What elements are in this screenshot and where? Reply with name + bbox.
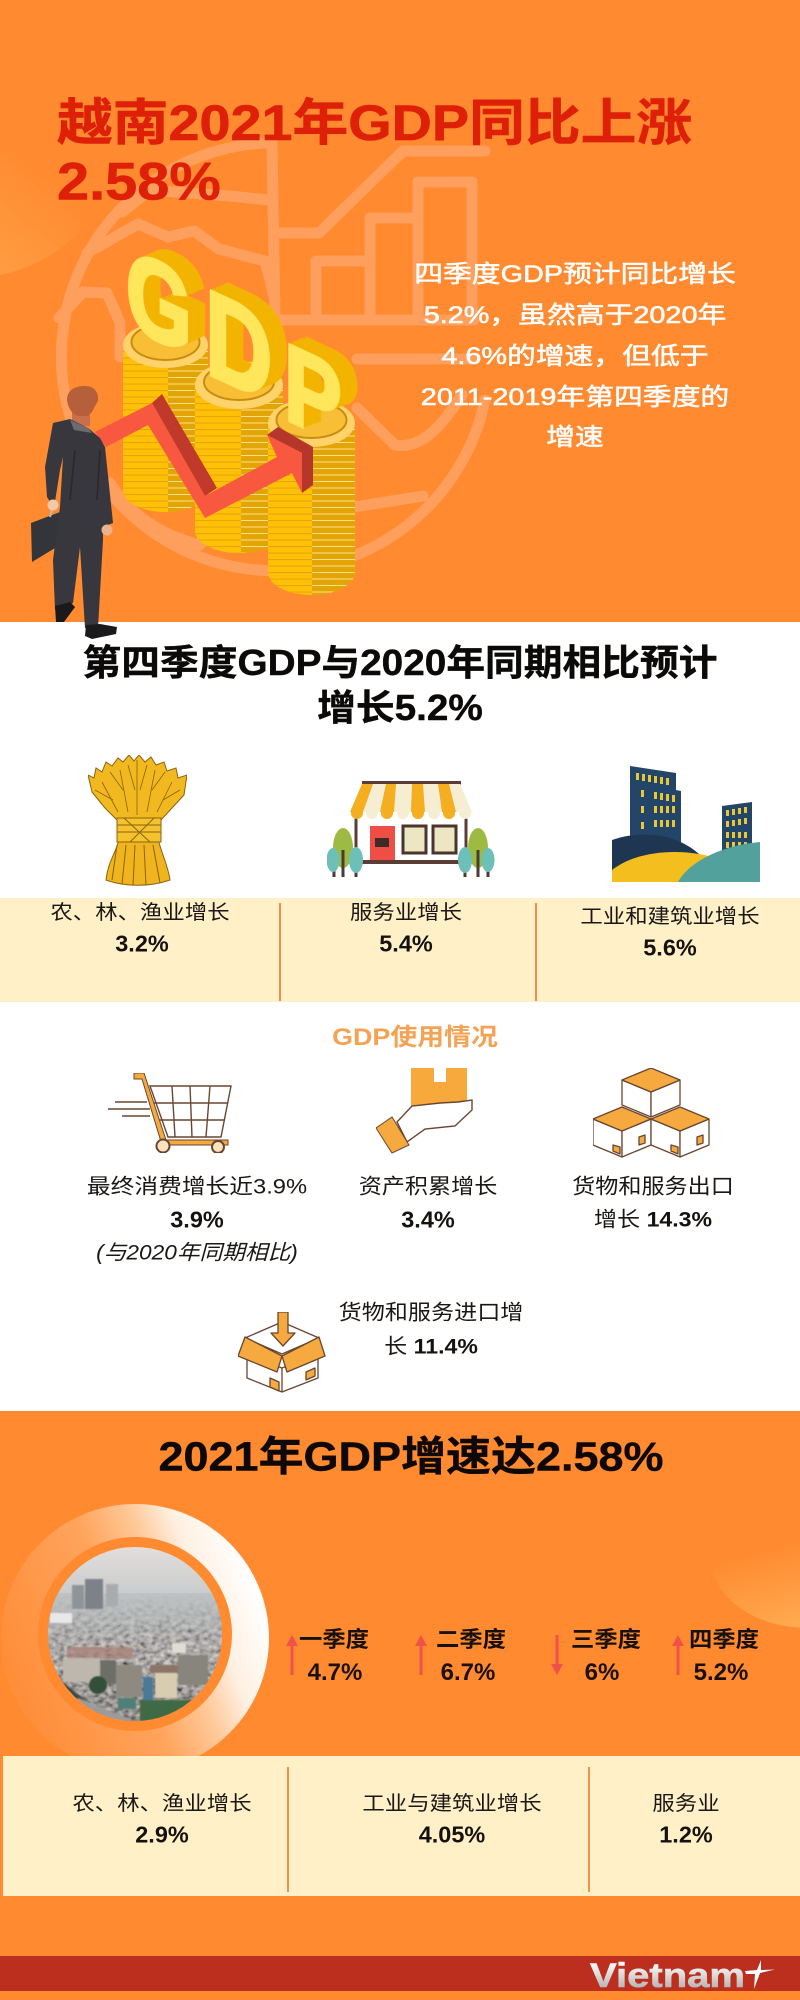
sector: industry and construction: 工业与建筑业增长 xyxy=(362,1793,542,1815)
sector: services: 服务业 xyxy=(652,1793,720,1815)
icon: open box with arrow xyxy=(238,1312,326,1393)
heading: fourth quarter growth: 增长5.2% xyxy=(317,687,483,728)
sector: services: 5.4% xyxy=(379,930,433,956)
illustration: businessman with briefcase xyxy=(31,386,117,639)
sector: agriculture: 2.9% xyxy=(135,1822,189,1848)
text: asset accumulation: 资产积累增长 xyxy=(359,1176,497,1198)
quarter 2: 6.7% xyxy=(441,1659,495,1686)
icon: shopping cart xyxy=(108,1073,232,1153)
quarter 1 xyxy=(286,1627,369,1686)
icon: wheat sheaf xyxy=(88,755,187,886)
text: asset accumulation: 3.4% xyxy=(401,1206,455,1232)
heading: GDP use: GDP使用情况 xyxy=(332,1024,498,1051)
quarter 4: 5.2% xyxy=(694,1659,748,1686)
sector: services: 1.2% xyxy=(659,1822,713,1848)
text: exports of goods and services xyxy=(572,1176,734,1232)
sector: agriculture xyxy=(50,902,230,956)
quarter 1: 4.7% xyxy=(308,1659,362,1686)
title: 越南2021年GDP同比上涨 xyxy=(57,95,692,151)
text: imports of goods and services xyxy=(339,1302,523,1358)
title: 2.58% xyxy=(57,152,221,212)
sector: agriculture xyxy=(72,1793,252,1848)
sector: services xyxy=(652,1793,720,1848)
title xyxy=(57,95,692,212)
text: exports of goods and services: 增长 14.3% xyxy=(594,1208,712,1232)
quarter 4 xyxy=(672,1627,759,1686)
sector: industry and construction xyxy=(362,1793,542,1848)
text: final consumption: (与2020年同期相比) xyxy=(96,1242,298,1264)
sector: industry and construction: 5.6% xyxy=(643,934,697,960)
icon: shop xyxy=(327,781,494,877)
sector: agriculture: 农、林、渔业增长 xyxy=(50,902,230,924)
sector: industry and construction xyxy=(580,906,760,960)
panel: hero xyxy=(0,0,800,622)
decorative light blob top left xyxy=(0,196,61,275)
text: final consumption xyxy=(87,1176,307,1264)
panel: sector growth band xyxy=(0,898,800,1002)
quarter 4: 四季度 xyxy=(689,1627,759,1652)
quarter 3 xyxy=(551,1627,641,1686)
text: exports of goods and services: 货物和服务出口 xyxy=(572,1176,734,1198)
quarter 2: 二季度 xyxy=(436,1627,506,1652)
quarter 3: 三季度 xyxy=(571,1627,641,1652)
icon: stacked boxes xyxy=(593,1068,710,1158)
sector: industry and construction: 4.05% xyxy=(419,1822,485,1848)
intro paragraph xyxy=(414,261,736,451)
text: final consumption: 3.9% xyxy=(170,1206,224,1232)
sector: services xyxy=(350,902,462,956)
heading: 2021 growth: 2021年GDP增速达2.58% xyxy=(159,1434,663,1480)
icon: hand holding package xyxy=(376,1068,473,1154)
sector: agriculture: 3.2% xyxy=(115,930,169,956)
quarter 3: 6% xyxy=(585,1659,619,1686)
sector: services: 服务业增长 xyxy=(350,902,462,924)
intro paragraph: 四季度GDP预计同比增长 xyxy=(414,261,736,288)
icon: city buildings on hills xyxy=(612,766,760,882)
decorative light blob right xyxy=(718,1561,800,1628)
illustration: GDP coin stacks: P xyxy=(284,319,342,468)
illustration: GDP coin stacks: D xyxy=(205,262,272,429)
illustration: GDP coin stacks xyxy=(123,240,358,595)
panel: full-year 2021 GDP xyxy=(0,1411,800,2000)
heading: fourth quarter growth xyxy=(83,642,717,728)
sector: agriculture: 农、林、渔业增长 xyxy=(72,1793,252,1815)
text: imports of goods and services: 货物和服务进口增 xyxy=(339,1302,523,1324)
intro paragraph: 2011-2019年第四季度的 xyxy=(421,384,729,411)
panel: fourth quarter GDP by sector and GDP use xyxy=(0,622,800,1411)
sector: industry and construction: 工业和建筑业增长 xyxy=(580,906,760,928)
panel: full-year sector growth band xyxy=(3,1756,800,1896)
intro paragraph: 5.2%，虽然高于2020年 xyxy=(424,302,726,329)
text: asset accumulation xyxy=(359,1176,497,1232)
image: city photo in ring xyxy=(1,1504,269,1756)
heading: fourth quarter growth: 第四季度GDP与2020年同期相比预计 xyxy=(83,642,717,683)
footer bar with Vietnam+ logo xyxy=(0,1956,800,1991)
intro paragraph: 4.6%的增速，但低于 xyxy=(441,343,709,370)
text: imports of goods and services: 长 11.4% xyxy=(384,1336,478,1358)
globe and chart background illustration xyxy=(54,138,490,576)
quarter 1: 一季度 xyxy=(299,1627,369,1652)
text: final consumption: 最终消费增长近3.9% xyxy=(87,1176,307,1198)
quarter 2 xyxy=(415,1627,506,1686)
intro paragraph: 增速 xyxy=(546,424,604,451)
arrow: red rising and falling trend arrow xyxy=(95,394,313,518)
